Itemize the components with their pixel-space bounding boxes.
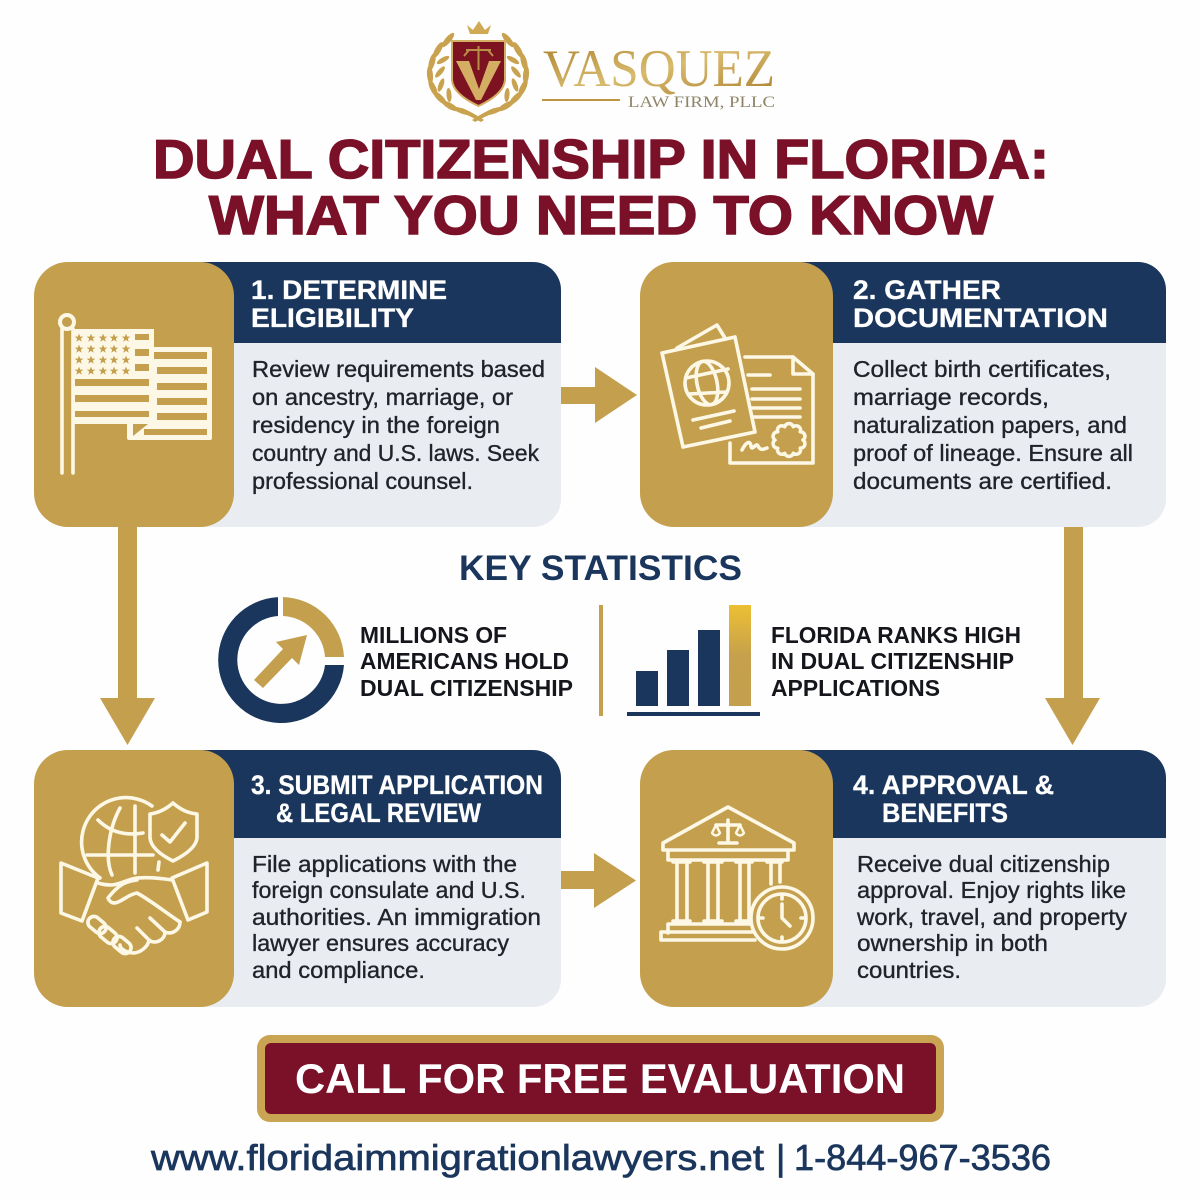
contact line: 1-844-967-3536	[794, 1137, 1051, 1178]
contact line: www.floridaimmigrationlawyers.net	[150, 1137, 764, 1178]
icon: V monogram	[456, 61, 501, 100]
text block: country and U.S. laws. Seek	[252, 440, 539, 466]
stat: millions of americans: AMERICANS HOLD	[360, 648, 569, 674]
panel: step 2 gather documentation	[640, 262, 1166, 527]
heading: 2. GATHER	[853, 275, 1001, 305]
stat: millions of americans: MILLIONS OF	[360, 622, 507, 648]
icon: crown	[467, 21, 491, 34]
tagline: LAW FIRM, PLLC	[628, 94, 775, 111]
text block: marriage records,	[853, 384, 1049, 410]
arrow: step 1 to step 2	[561, 367, 637, 423]
text block: countries.	[857, 957, 961, 983]
icon: laurel wreath	[426, 31, 530, 122]
call to action button	[257, 1035, 944, 1122]
panel: step 3 submit application	[34, 750, 561, 1007]
icon: courthouse with clock	[661, 807, 813, 949]
wordmark: VASQUEZ	[543, 40, 775, 98]
icon: shield	[452, 41, 505, 106]
heading: & LEGAL REVIEW	[276, 798, 481, 828]
arrow: step 1 to step 3	[100, 527, 155, 745]
heading: DOCUMENTATION	[853, 303, 1108, 333]
stat: millions of americans	[360, 622, 573, 701]
heading: 1. DETERMINE	[251, 275, 447, 305]
icon: american flag	[60, 315, 210, 473]
text block: approval. Enjoy rights like	[857, 877, 1126, 903]
heading: key statistics: KEY STATISTICS	[459, 549, 742, 588]
contact line	[150, 1137, 1051, 1178]
text block: work, travel, and property	[856, 904, 1128, 930]
text block	[252, 356, 545, 494]
contact line: |	[776, 1137, 785, 1178]
text block: Collect birth certificates,	[853, 356, 1111, 382]
heading	[853, 275, 1108, 333]
text block: proof of lineage. Ensure all	[853, 440, 1133, 466]
text block: authorities. An immigration	[252, 904, 541, 930]
text block	[252, 851, 541, 983]
heading	[853, 770, 1054, 828]
text block: on ancestry, marriage, or	[252, 384, 513, 410]
text block: ownership in both	[857, 930, 1048, 956]
text block: foreign consulate and U.S.	[252, 877, 526, 903]
icon: globe shield handshake	[61, 798, 207, 956]
text block: File applications with the	[252, 851, 517, 877]
icon: passport and certificate	[662, 325, 813, 463]
panel: step 4 approval and benefits	[640, 750, 1166, 1007]
text block: residency in the foreign	[252, 412, 500, 438]
text block: Receive dual citizenship	[857, 851, 1110, 877]
text block: documents are certified.	[853, 468, 1112, 494]
stat: florida ranks high: FLORIDA RANKS HIGH	[771, 622, 1021, 648]
arrow: step 3 to step 4	[561, 853, 636, 908]
title: DUAL CITIZENSHIP IN FLORIDA:	[153, 128, 1049, 190]
call to action button: CALL FOR FREE EVALUATION	[295, 1055, 905, 1102]
title	[153, 128, 1049, 246]
stat: florida ranks high: IN DUAL CITIZENSHIP	[771, 648, 1014, 674]
heading: ELIGIBILITY	[251, 303, 414, 333]
heading	[251, 275, 447, 333]
logo: Vasquez Law Firm	[426, 21, 775, 122]
text block: professional counsel.	[252, 468, 473, 494]
text block	[856, 851, 1128, 983]
arrow: step 2 to step 4	[1045, 527, 1100, 745]
stat: florida ranks high: APPLICATIONS	[771, 675, 940, 701]
chart: rising bars	[627, 605, 760, 716]
heading: BENEFITS	[882, 798, 1008, 828]
text block: lawyer ensures accuracy	[252, 930, 509, 956]
stat: florida ranks high	[771, 622, 1021, 701]
panel: step 1 determine eligibility	[34, 262, 561, 527]
icon: small scales	[464, 46, 493, 70]
text block: naturalization papers, and	[853, 412, 1127, 438]
text block	[853, 356, 1133, 494]
icon: up arrow	[254, 635, 307, 688]
text block: Review requirements based	[252, 356, 545, 382]
heading	[251, 770, 543, 828]
text block: and compliance.	[252, 957, 425, 983]
chart: donut with arrow	[218, 597, 344, 723]
heading: 4. APPROVAL &	[853, 770, 1054, 800]
title: WHAT YOU NEED TO KNOW	[209, 184, 993, 246]
stat: millions of americans: DUAL CITIZENSHIP	[360, 675, 573, 701]
heading: 3. SUBMIT APPLICATION	[251, 770, 543, 800]
